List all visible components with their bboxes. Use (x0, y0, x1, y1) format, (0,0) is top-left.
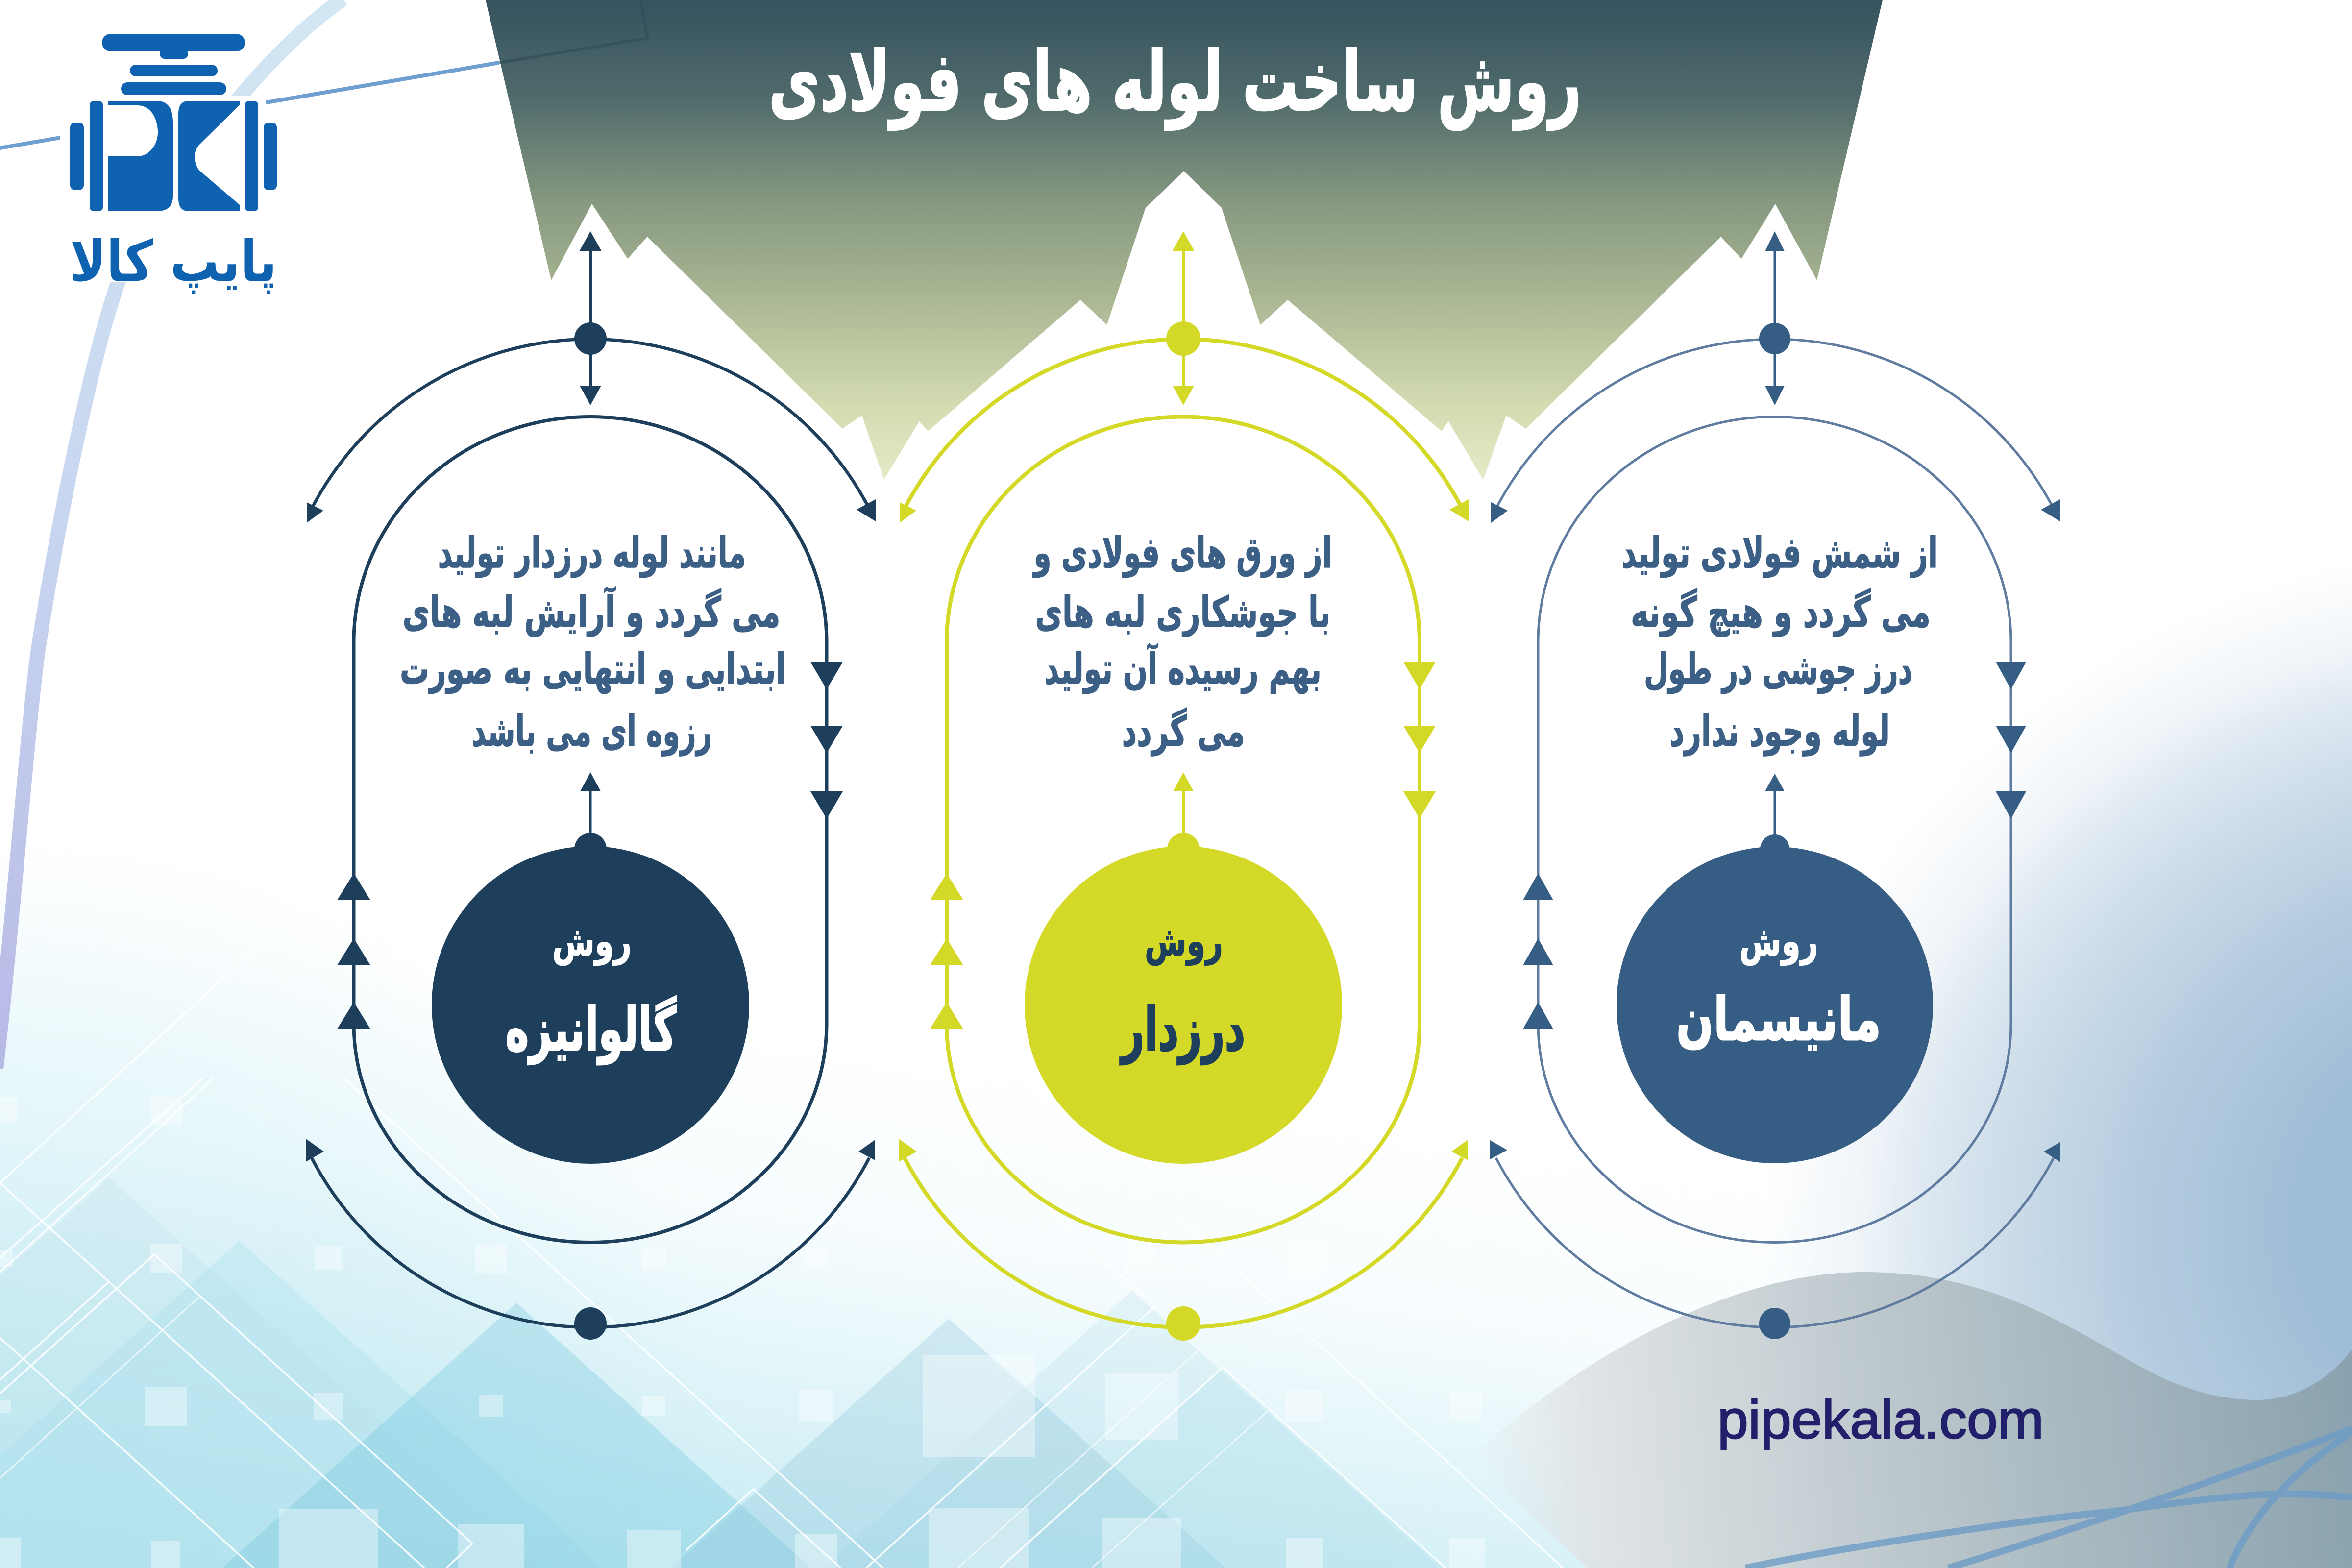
circle badge (1617, 834, 1933, 1163)
logo text: پایپ کالا (70, 229, 277, 294)
circle badge: مانیسمان (1676, 984, 1881, 1054)
decorative arc (0, 0, 343, 1068)
grey hump (1470, 1272, 2352, 1568)
blue line top left (0, 63, 499, 148)
description text: از شمش فولادی تولید (1621, 529, 1938, 578)
top banner mountain shape (486, 0, 1883, 480)
description text: لوله وجود ندارد (1669, 707, 1890, 756)
panel: galvanized (306, 231, 876, 1340)
description text: ابتدایی و انتهایی به صورت (400, 645, 786, 694)
top node with arrows (1166, 231, 1200, 405)
bottom node (1166, 1306, 1200, 1341)
outer arcs with arrows (899, 339, 1469, 1327)
description text: می گردد (1122, 707, 1245, 756)
description text: با جوشکاری لبه های (1035, 588, 1331, 637)
description text: بهم رسیده آن تولید (1044, 643, 1322, 694)
circle badge: روش (1145, 917, 1223, 966)
background squares (0, 1097, 1485, 1568)
top node with arrows (1759, 231, 1790, 405)
title: روش ساخت لوله های فولادی (768, 34, 1582, 130)
logo icon (70, 34, 277, 211)
description text: می گردد و آرایش لبه های (403, 587, 780, 637)
description text (1032, 529, 1332, 756)
description text: درز جوشی در طول (1644, 645, 1912, 694)
outer arcs with arrows (306, 339, 876, 1327)
up arrow from circle (1173, 772, 1194, 838)
banner overlay line (499, 0, 647, 63)
panel: seamed (899, 231, 1469, 1341)
circle badge: روش (552, 917, 632, 966)
blue curves bottom right (1745, 1428, 2352, 1568)
top node with arrows (574, 231, 607, 405)
circle badge (1025, 833, 1342, 1164)
circle badge: روش (1740, 917, 1818, 966)
bottom node (574, 1307, 607, 1340)
logo background (60, 96, 266, 282)
description text: از ورق های فولادی و (1032, 529, 1332, 578)
description text (400, 529, 786, 756)
up arrow from circle (580, 772, 601, 838)
website url: pipekala.com (1717, 1390, 2044, 1450)
description text: می گردد و هیچ گونه (1631, 588, 1931, 637)
inner arch with arrows (1523, 417, 2026, 1242)
panel: seamless (1490, 231, 2060, 1339)
description text (1621, 529, 1938, 756)
circle badge: گالوانیزه (506, 995, 677, 1065)
bottom node (1759, 1308, 1790, 1339)
logo (70, 34, 277, 294)
inner arch with arrows (930, 417, 1436, 1242)
description text: مانند لوله درزدار تولید (438, 529, 746, 578)
background chevron lines (0, 877, 1563, 1568)
up arrow from circle (1765, 774, 1785, 838)
inner arch with arrows (337, 417, 843, 1242)
circle badge: درزدار (1119, 995, 1246, 1065)
outer arcs with arrows (1490, 339, 2060, 1327)
description text: رزوه ای می باشد (471, 707, 712, 756)
circle badge (432, 833, 749, 1164)
background triangles (0, 1178, 1446, 1568)
